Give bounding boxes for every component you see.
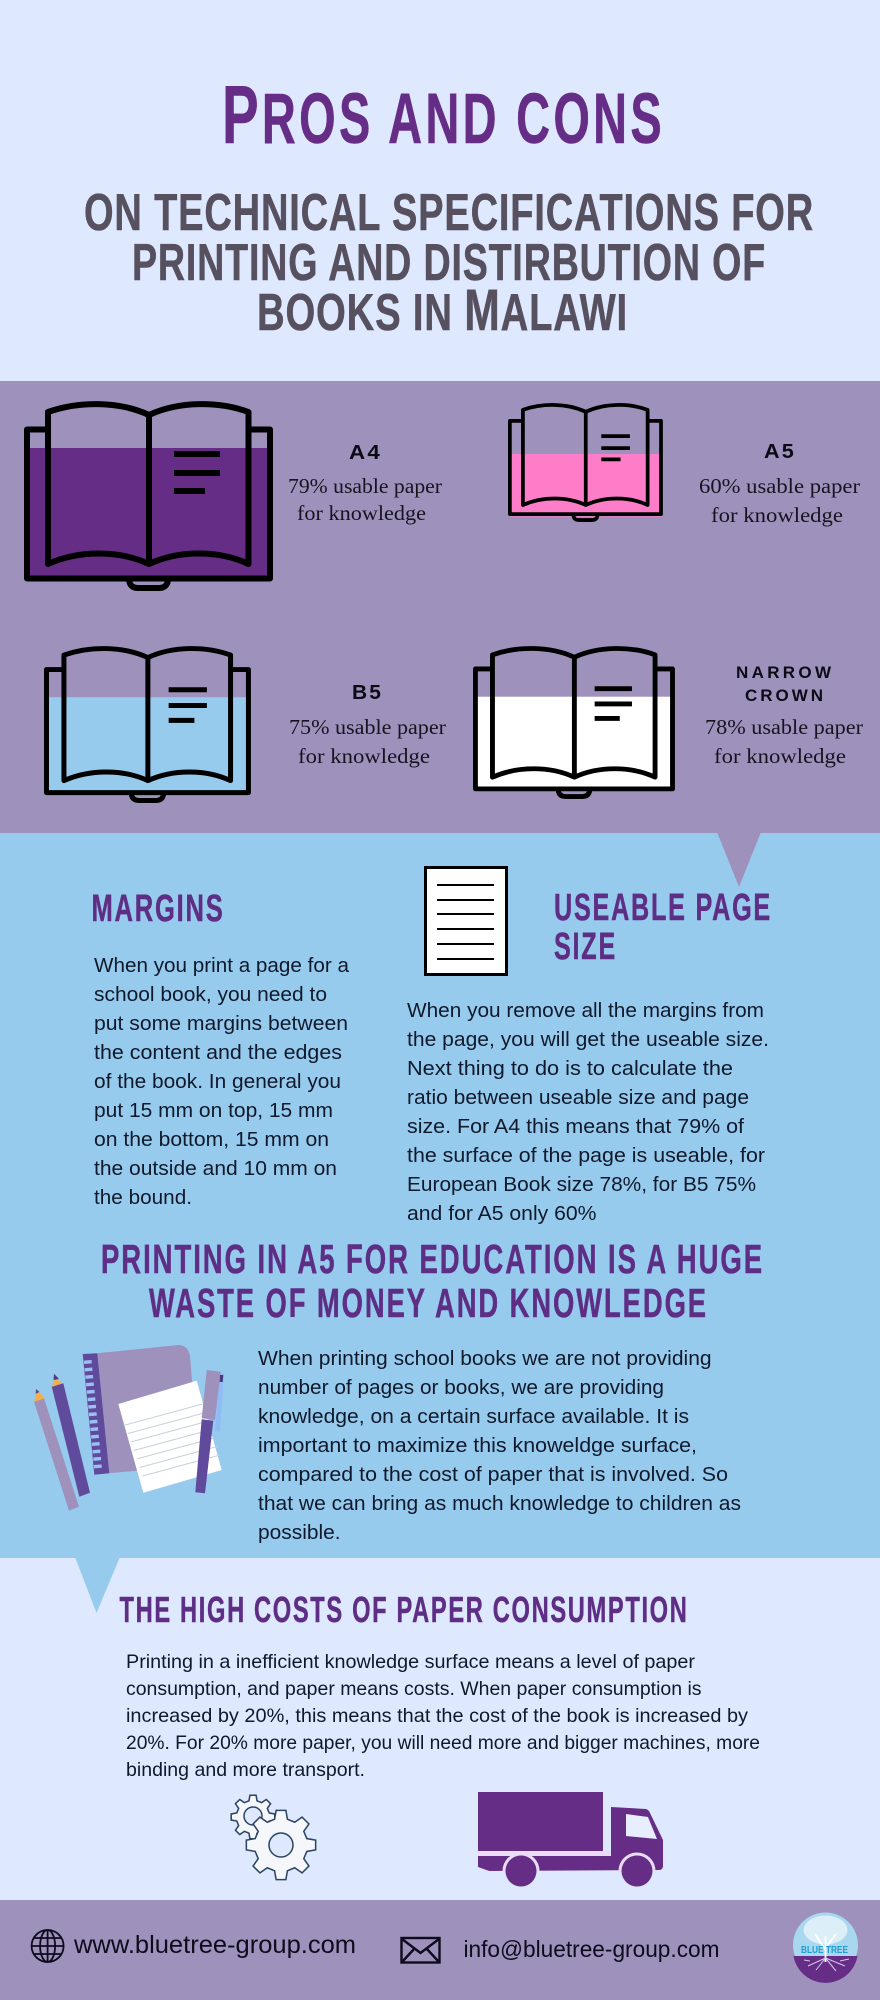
label: narrow crown: for knowledge [714,744,846,768]
text: email: info@bluetree-group.com [464,1936,720,1962]
text block: printing in A5: possible. [258,1521,341,1544]
text block: printing in A5: When printing school books we are not providing [258,1347,712,1370]
arrow: blue speech notch [75,1557,120,1613]
panel: book formats [0,381,880,833]
text block: margins: When you print a page for a [94,954,350,977]
panel: header [84,68,814,343]
text block: useable page size: Next thing to do is to calculate the [407,1057,733,1080]
text block: useable page size: the page, you will get the useable size. [407,1028,769,1051]
text: website: www.bluetree-group.com [73,1931,356,1959]
text block: printing in A5 [258,1347,741,1544]
icon: page [426,868,506,974]
label: A5: A5 [764,441,796,463]
icon: truck [478,1792,670,1890]
title: PROS AND CONS [222,68,665,161]
icon: book B5 [46,649,248,800]
label: narrow crown [705,663,863,768]
icon: book narrow crown [475,648,673,797]
text block: useable page size: and for A5 only 60% [407,1202,596,1225]
text block: useable page size: When you remove all the margins from [407,999,764,1022]
label: A4: for knowledge [297,501,426,525]
logo: blue tree: BLUE TREE [801,1944,848,1956]
text block: useable page size [407,999,769,1225]
text block: printing in A5: that we can bring as much knowledge to children as [258,1492,741,1515]
icon: gears [231,1795,316,1880]
label: B5: for knowledge [298,744,430,768]
label: narrow crown: 78% usable paper [705,715,863,739]
panel: blue explanations [0,832,880,1558]
heading: useable page size: USEABLE PAGE [554,887,772,929]
label: A4 [288,442,442,525]
arrow: purple speech notch [717,832,761,887]
text block: useable page size: European Book size 78%, for B5 75% [407,1173,756,1196]
text block: high costs [126,1651,760,1781]
text block: printing in A5: important to maximize this knoweldge surface, [258,1434,697,1457]
text block: margins: of the book. In general you [94,1070,341,1093]
label: A5: for knowledge [711,503,843,527]
label: B5: 75% usable paper [289,715,446,739]
text block: margins: the outside and 10 mm on [94,1157,337,1180]
heading: printing in A5 [101,1236,764,1326]
heading: useable page size [554,887,772,968]
text block: high costs: 20%. For 20% more paper, you will need more and bigger machines, more [126,1732,760,1754]
icon: globe [32,1930,64,1962]
illustration: notebook and pencils [34,1345,224,1511]
text block: high costs: increased by 20%, this means that the cost of the book is increased by [126,1705,748,1727]
text block: margins: school book, you need to [94,983,327,1006]
text block: useable page size: size. For A4 this means that 79% of [407,1115,744,1138]
label: B5 [289,682,446,768]
logo: blue tree [793,1912,858,1983]
text block: margins [94,954,350,1209]
label: A5 [699,441,860,527]
text block: useable page size: ratio between useable size and page [407,1086,749,1109]
heading: useable page size: SIZE [554,926,617,968]
subtitle: BOOKS IN MALAWI [257,278,628,343]
label: A5: 60% usable paper [699,474,860,498]
label: B5: B5 [352,682,383,704]
text block: margins: the bound. [94,1186,192,1209]
text block: high costs: consumption, and paper means costs. When paper consumption is [126,1678,702,1700]
text block: margins: put 15 mm on top, 15 mm [94,1099,333,1122]
text block: printing in A5: number of pages or books, we are providing [258,1376,664,1399]
label: A4: A4 [349,442,382,464]
label: narrow crown: NARROW [736,663,832,682]
icon: book A5 [510,405,661,520]
label: narrow crown: CROWN [745,686,823,705]
text block: printing in A5: knowledge, on a certain surface available. It is [258,1405,689,1428]
subtitle [84,184,814,343]
text block: margins: the content and the edges [94,1041,342,1064]
text block: margins: put some margins between [94,1012,348,1035]
panel: footer [0,1900,880,2000]
text block: high costs: binding and more transport. [126,1759,365,1781]
text block: useable page size: the surface of the page is useable, for [407,1144,765,1167]
icon: envelope [402,1938,440,1962]
label: A4: 79% usable paper [288,474,442,498]
text block: margins: on the bottom, 15 mm on [94,1128,329,1151]
panel: high costs [75,1557,760,1890]
icon: book A4 [27,404,270,588]
text block: printing in A5: compared to the cost of paper that is involved. So [258,1463,728,1486]
heading: margins: MARGINS [92,888,224,930]
text block: high costs: Printing in a inefficient knowledge surface means a level of paper [126,1651,696,1673]
